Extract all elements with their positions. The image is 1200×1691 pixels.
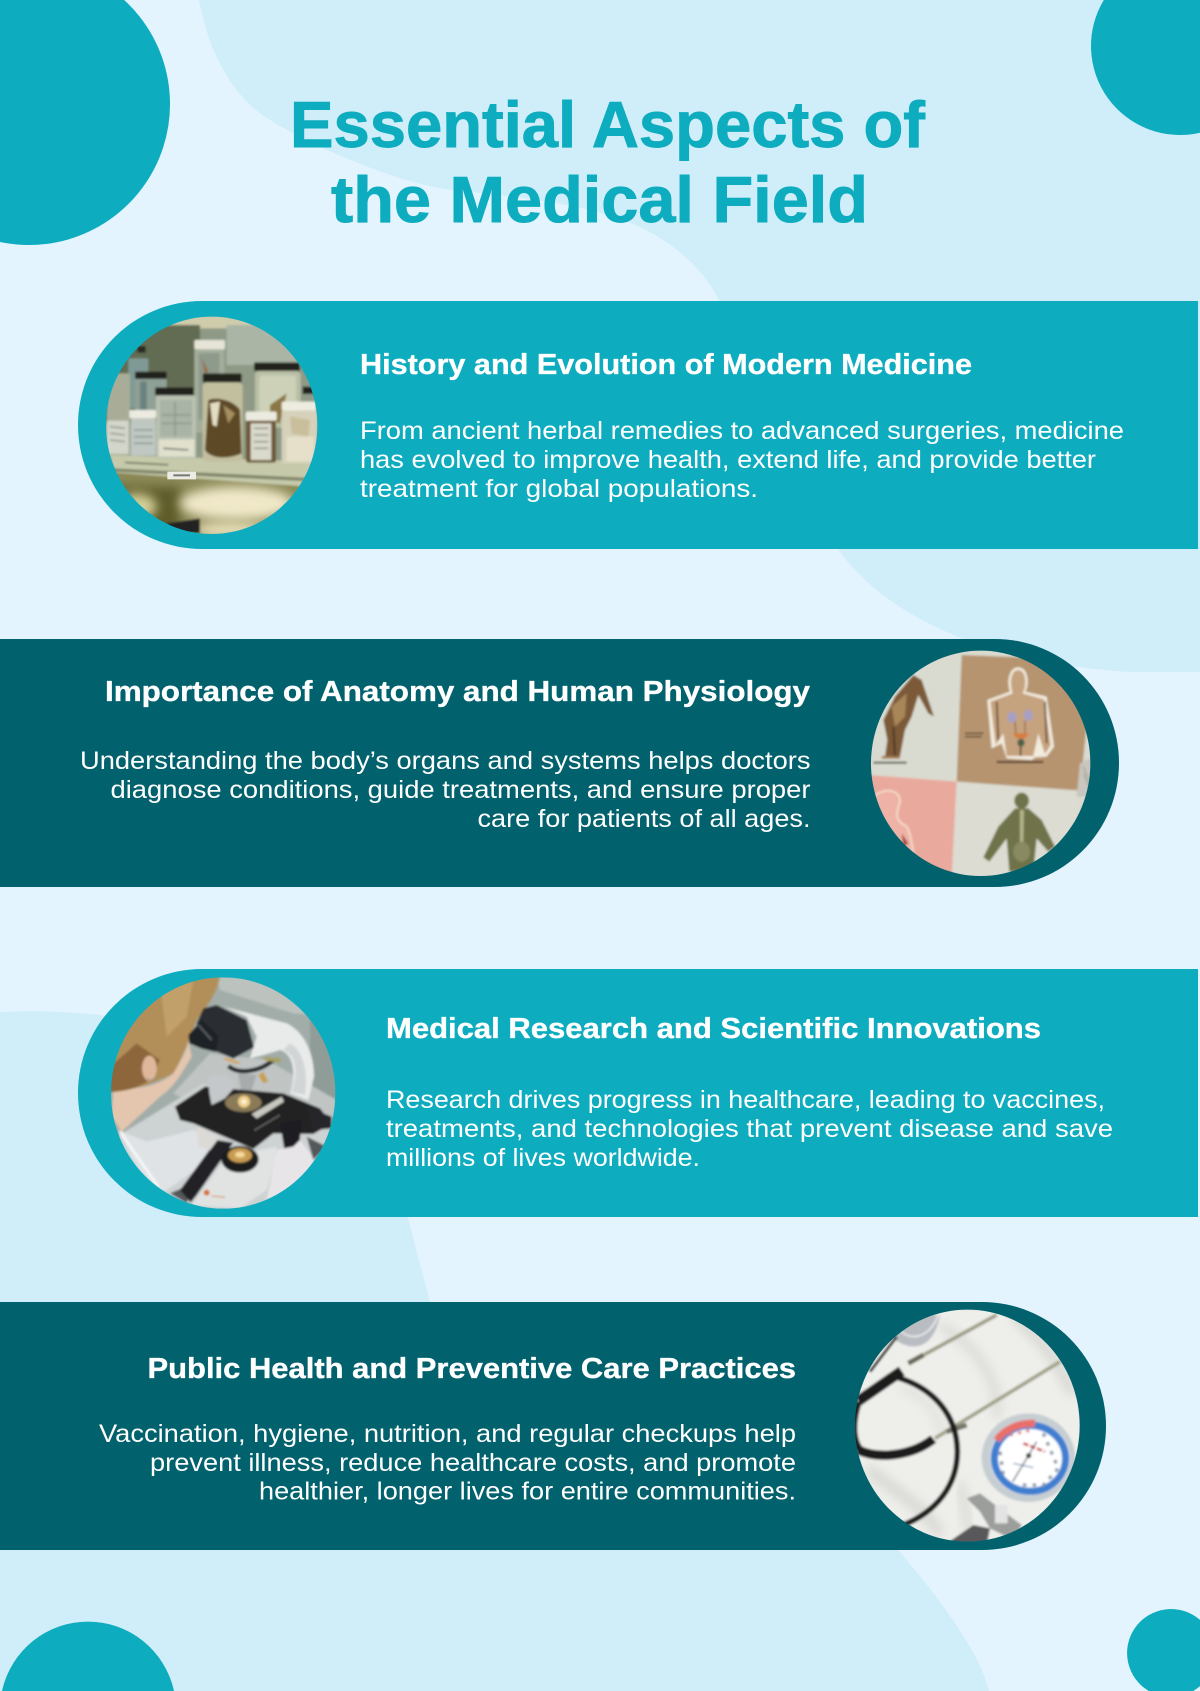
panel background shape	[0, 639, 1119, 887]
panel background shape	[78, 301, 1198, 549]
heading: History and Evolution of Modern Medicine	[360, 349, 972, 381]
background blob: top right	[199, 0, 1200, 672]
corner circle: top right	[1091, 0, 1200, 135]
corner circle: bottom right	[1127, 1609, 1200, 1691]
body text	[99, 1420, 796, 1506]
body text: Understanding the body’s organs and systems helps doctors	[80, 747, 811, 775]
photo: researcher at a microscope	[110, 977, 337, 1210]
body text: has evolved to improve health, extend life, and provide better	[360, 446, 1096, 474]
heading: Importance of Anatomy and Human Physiology	[105, 676, 810, 708]
body text: From ancient herbal remedies to advanced surgeries, medicine	[360, 417, 1124, 445]
photo: anatomy charts	[868, 648, 1095, 878]
heading: Medical Research and Scientific Innovations	[386, 1013, 1041, 1045]
panel: medical research	[78, 969, 1198, 1217]
body text	[360, 417, 1124, 503]
photo: specimen jars on a shelf	[103, 313, 320, 540]
body text: treatment for global populations.	[360, 475, 758, 503]
panel background shape	[0, 1302, 1106, 1550]
body text: healthier, longer lives for entire communities.	[259, 1478, 796, 1506]
panel background shape	[78, 969, 1198, 1217]
title: Essential Aspects of	[290, 88, 925, 161]
photo: stethoscope and blood pressure gauge	[853, 1308, 1083, 1545]
panel: history and evolution	[78, 301, 1198, 549]
title: the Medical Field	[331, 163, 868, 236]
body text: treatments, and technologies that prevent disease and save	[386, 1115, 1113, 1143]
corner circle: bottom left	[2, 1622, 174, 1691]
body text	[386, 1086, 1113, 1172]
body text: millions of lives worldwide.	[386, 1144, 700, 1172]
corner circle: top left	[0, 0, 170, 245]
heading: Public Health and Preventive Care Practices	[148, 1353, 796, 1385]
title	[290, 88, 925, 236]
body text	[80, 747, 811, 833]
panel: anatomy and physiology	[0, 639, 1119, 887]
body text: care for patients of all ages.	[478, 805, 810, 833]
body text: Vaccination, hygiene, nutrition, and regular checkups help	[99, 1420, 796, 1448]
body text: Research drives progress in healthcare, leading to vaccines,	[386, 1086, 1105, 1114]
background blob: bottom left	[0, 1011, 989, 1691]
panel: public health	[0, 1302, 1106, 1550]
body text: diagnose conditions, guide treatments, and ensure proper	[110, 776, 811, 804]
body text: prevent illness, reduce healthcare costs, and promote	[150, 1449, 796, 1477]
